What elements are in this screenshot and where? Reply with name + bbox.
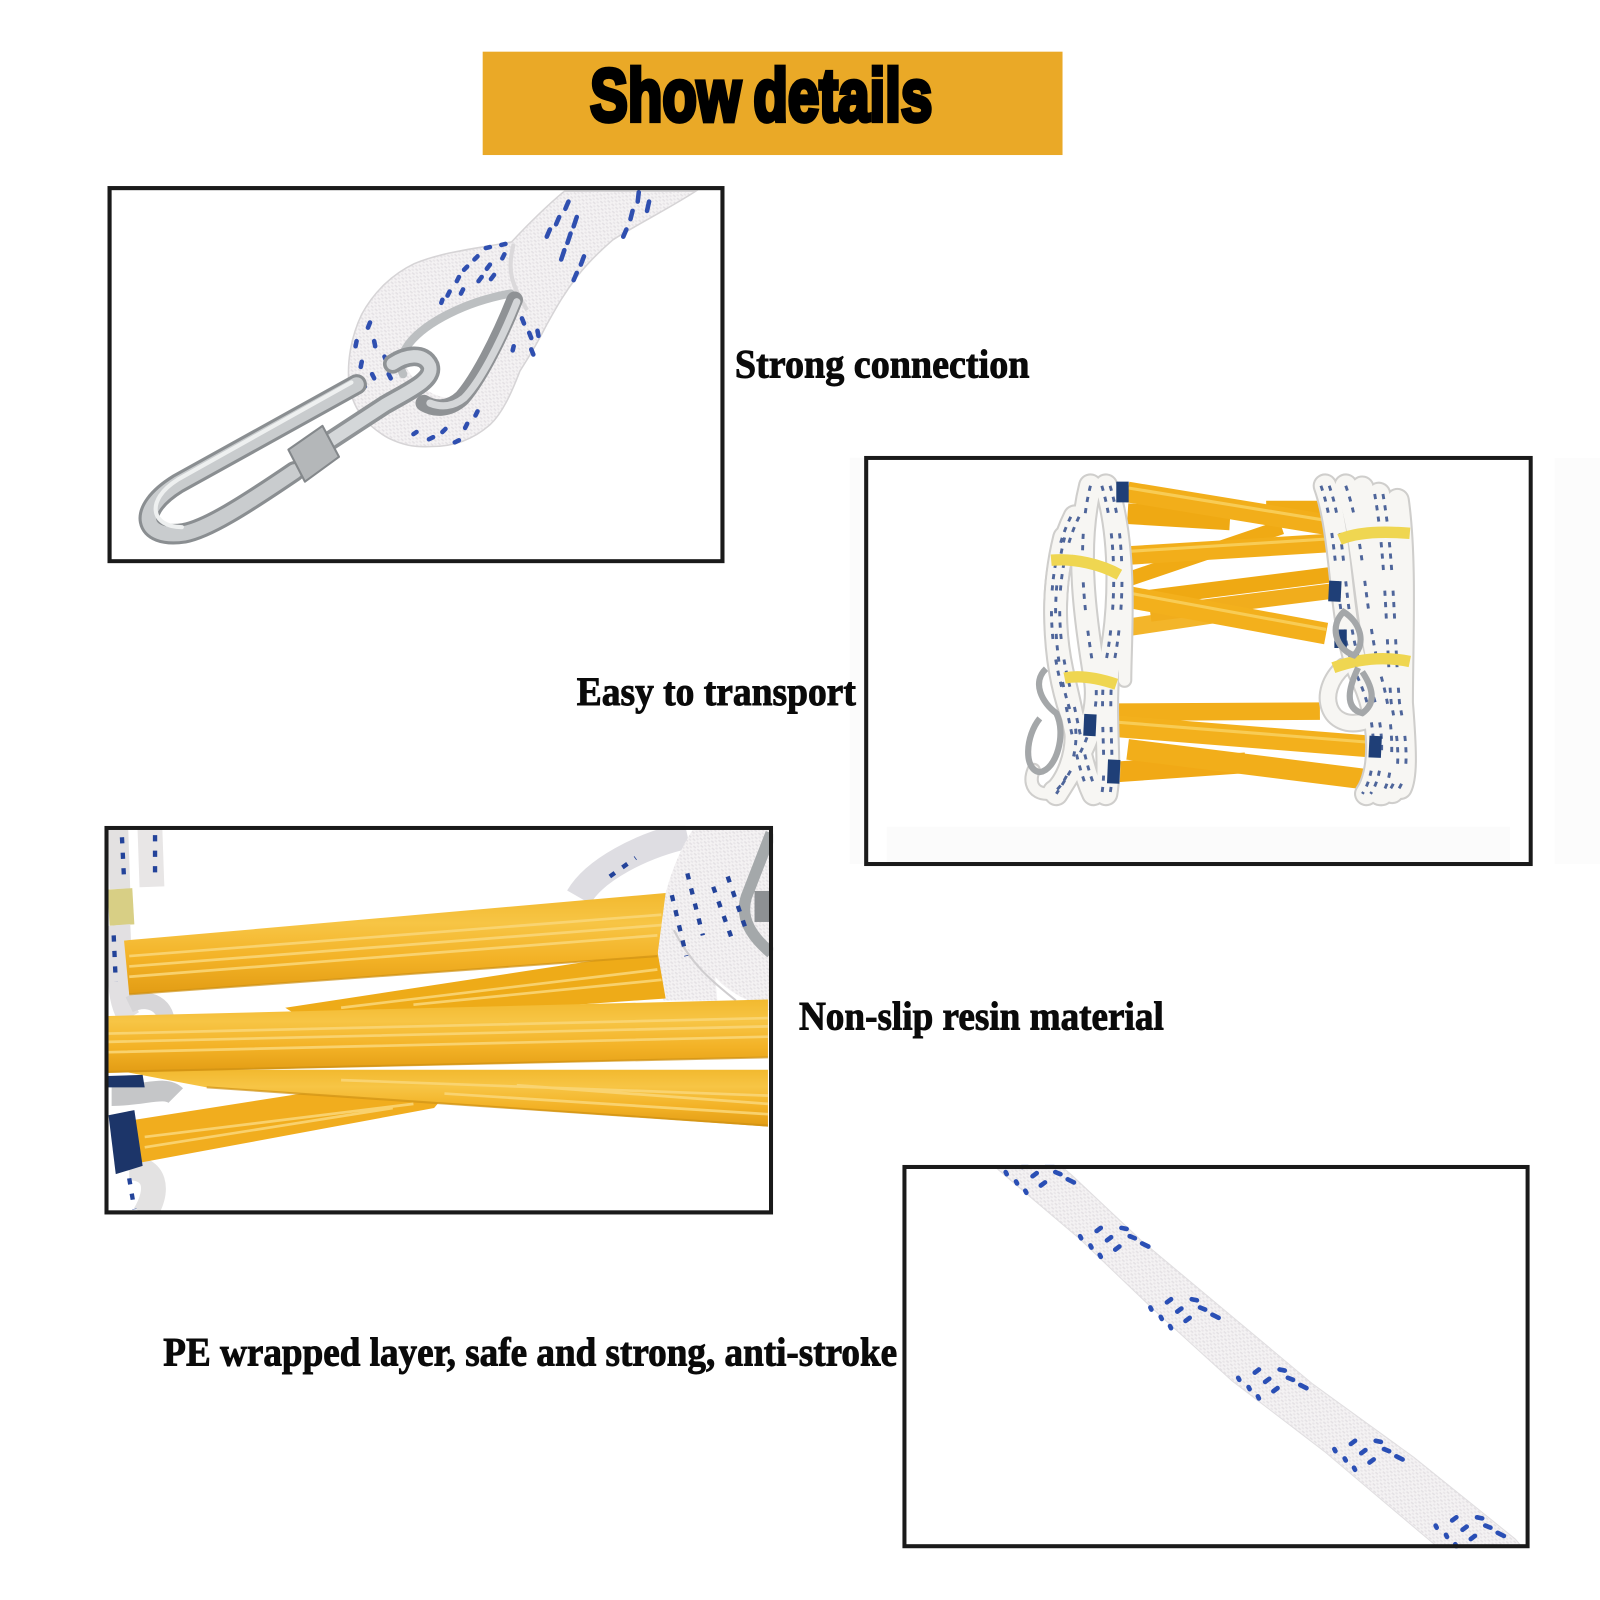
- blue caps: [107, 1075, 145, 1174]
- panel: strong connection photo: [110, 188, 722, 561]
- frame: [110, 188, 722, 561]
- blue marks: [1006, 1164, 1504, 1546]
- panel: non-slip resin rods photo: [106, 827, 771, 1214]
- rods: [109, 893, 768, 1163]
- label: PE wrapped layer: PE wrapped layer, safe and strong, anti-stroke: [163, 1329, 897, 1374]
- title text: Show details: [590, 54, 932, 137]
- label: easy to transport: Easy to transport: [577, 669, 856, 714]
- icon: carabiner: [149, 356, 430, 534]
- label: strong connection: Strong connection: [735, 341, 1029, 386]
- carabiners: [1028, 612, 1372, 772]
- ropes: [1032, 486, 1406, 794]
- rungs: [1095, 488, 1375, 780]
- rope: [997, 1164, 1521, 1546]
- panel: easy to transport photo: [866, 458, 1531, 864]
- icon: rope loop: [348, 191, 696, 447]
- blue caps: [1089, 482, 1376, 783]
- faint image edge: [850, 458, 865, 864]
- icon: thimble: [401, 294, 517, 408]
- faint image edge right: [1555, 458, 1600, 864]
- frame: [106, 828, 771, 1212]
- frame: [904, 1167, 1528, 1546]
- title banner: [483, 52, 1063, 155]
- bands: [1051, 532, 1410, 684]
- panel: PE wrapped rope photo: [904, 1164, 1528, 1546]
- frame: [866, 458, 1531, 864]
- label: non-slip resin material: Non-slip resin material: [799, 993, 1164, 1038]
- ropes behind rods: [112, 827, 771, 1214]
